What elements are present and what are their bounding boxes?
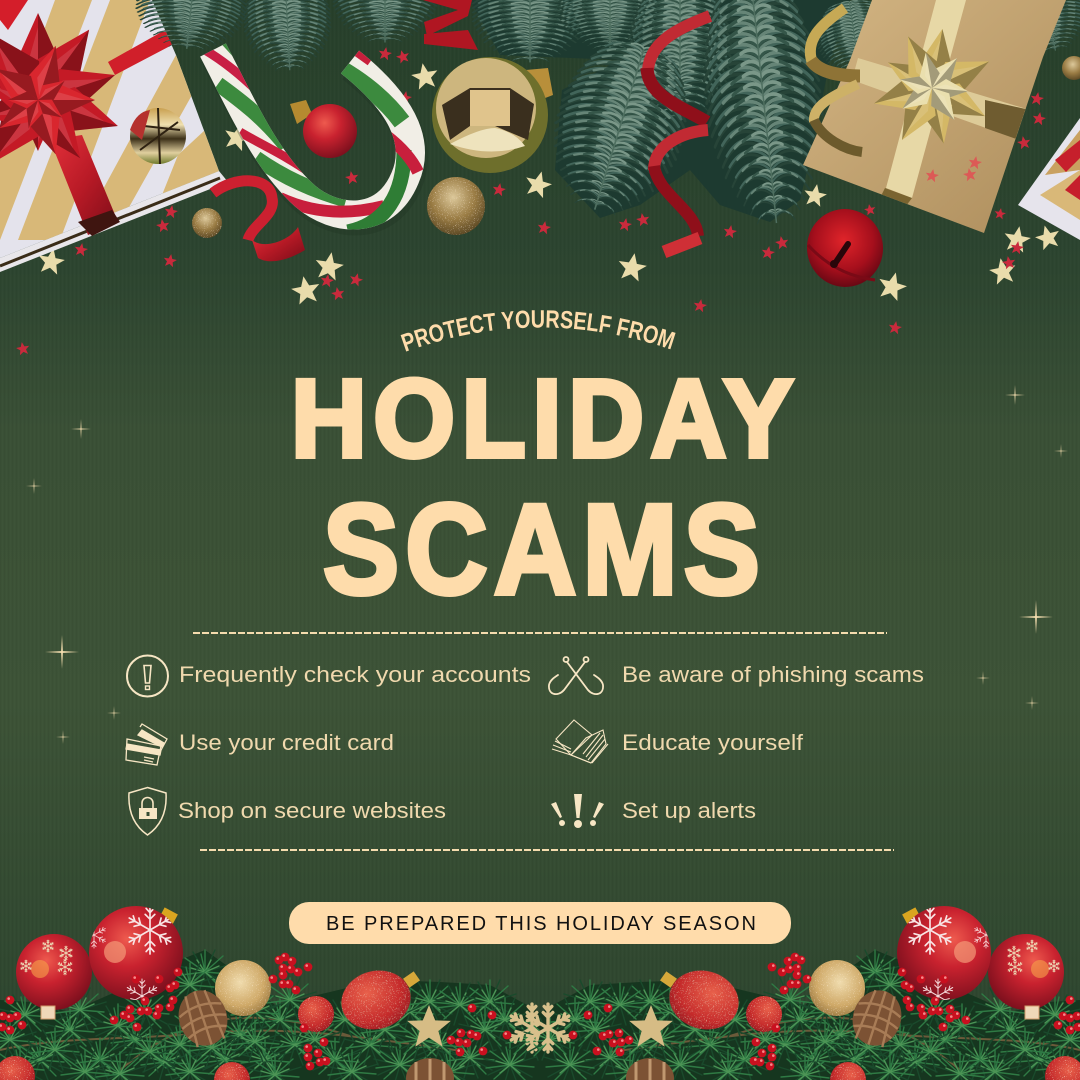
call to action pill: BE PREPARED THIS HOLIDAY SEASON (326, 913, 756, 935)
candy cane (205, 38, 418, 232)
title: HOLIDAY: HOLIDAY (291, 358, 800, 480)
scattered confetti stars, cream and red (15, 46, 1063, 356)
gold and white striped gift with red ribbon (0, 0, 230, 272)
tip: use credit card (126, 724, 394, 765)
tip: frequently check accounts (127, 656, 531, 696)
tip: educate yourself (552, 720, 804, 763)
tip: use credit card: Use your credit card (179, 730, 394, 755)
gold ribbon curl (810, 8, 862, 152)
kraft paper gift with gold bow (803, 0, 1066, 233)
garland: right half, mirrored (524, 906, 1080, 1080)
sparkles (26, 385, 1068, 744)
tip: phishing scams: Be aware of phishing scams (622, 662, 924, 687)
gold mirror ornament (432, 57, 553, 173)
fir branches across the top (133, 0, 1080, 229)
glitter gold balls (192, 177, 485, 238)
red ornament (290, 100, 357, 158)
garland: left half (0, 906, 556, 1080)
tips list (126, 656, 924, 835)
icon: gold jingle bell on gift (130, 108, 186, 164)
title: SCAMS: SCAMS (323, 478, 766, 622)
small gold bell at edge (1062, 56, 1080, 80)
tip: shop secure websites: Shop on secure websites (178, 798, 446, 823)
curved subtitle: PROTECT YOURSELF FROM (400, 310, 676, 352)
red curled ribbon (213, 0, 478, 261)
top dashed divider (193, 632, 887, 634)
red spiral ribbon through fir (647, 16, 710, 252)
tip: set up alerts: Set up alerts (622, 798, 756, 823)
tip: frequently check accounts: Frequently check your accounts (179, 662, 531, 687)
tip: set up alerts (551, 794, 756, 828)
bottom dashed divider (200, 849, 894, 851)
tip: phishing scams (549, 657, 924, 694)
call to action pill (289, 902, 791, 944)
small striped gift at right edge (1018, 118, 1080, 240)
icon: red jingle bell (801, 203, 889, 293)
tip: shop secure websites (129, 788, 446, 835)
tip: educate yourself: Educate yourself (622, 730, 804, 755)
